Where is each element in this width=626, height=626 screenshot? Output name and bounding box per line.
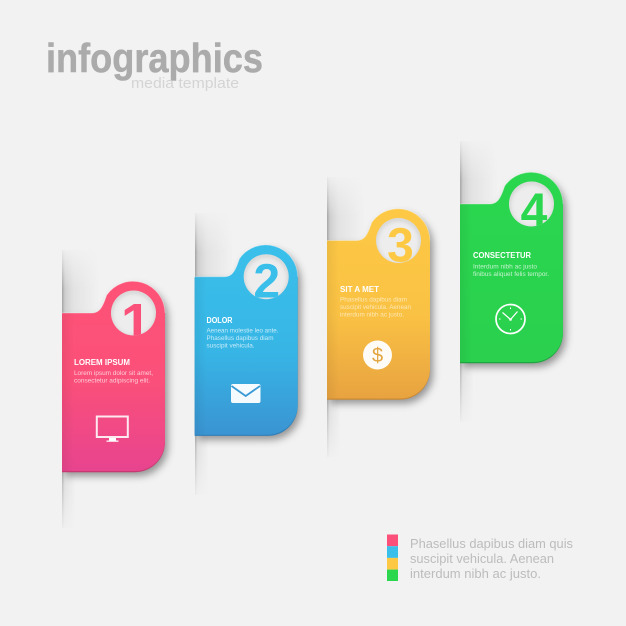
number hole bbox=[509, 182, 554, 226]
panel: step 3 yellow bbox=[327, 177, 433, 457]
text: lorem ipsum: consectetur adipiscing elit. bbox=[74, 378, 150, 384]
number 3: 3 bbox=[387, 220, 414, 272]
legend text: suscipit vehicula. Aenean bbox=[410, 552, 554, 566]
text: lorem ipsum: LOREM IPSUM bbox=[74, 357, 130, 367]
slit shadow bbox=[62, 250, 85, 526]
text: consectetur: CONSECTETUR bbox=[473, 250, 532, 260]
text: dolor: Aenean molestie leo ante. bbox=[206, 328, 279, 334]
icon: clock bbox=[496, 304, 525, 334]
panel: step 4 green bbox=[460, 141, 566, 422]
subheading: media template: media template bbox=[131, 75, 239, 92]
title bbox=[46, 35, 263, 92]
text: sit a met: Phasellus dapibus diam bbox=[340, 296, 407, 304]
heading: infographics: infographics bbox=[46, 35, 263, 81]
text: dolor bbox=[206, 315, 279, 350]
text: lorem ipsum: Lorem ipsum dolor sit amet, bbox=[74, 370, 153, 377]
text: lorem ipsum bbox=[74, 357, 153, 384]
legend text bbox=[410, 537, 573, 581]
number hole bbox=[376, 218, 421, 263]
slit shadow bbox=[327, 178, 350, 455]
text: sit a met bbox=[340, 284, 411, 318]
panel: step 1 pink bbox=[62, 250, 168, 528]
icon: envelope bbox=[231, 384, 260, 403]
card bbox=[62, 281, 168, 476]
card bbox=[460, 172, 566, 367]
number 2: 2 bbox=[253, 256, 280, 309]
icon: dollar coin: $ bbox=[372, 345, 383, 367]
number hole bbox=[111, 290, 156, 336]
slit shadow bbox=[195, 214, 218, 493]
card bbox=[195, 245, 301, 440]
slit shadow bbox=[460, 142, 483, 420]
card bbox=[327, 209, 433, 404]
text: consectetur: finibus aliquet felis tempor. bbox=[473, 271, 549, 278]
icon: monitor bbox=[97, 416, 128, 442]
legend text: Phasellus dapibus diam quis bbox=[410, 537, 573, 551]
text: dolor: Phasellus dapibus diam bbox=[206, 335, 274, 342]
legend text: interdum nibh ac justo. bbox=[410, 567, 541, 581]
legend bbox=[387, 534, 573, 581]
text: dolor: suscipit vehicula. bbox=[206, 342, 255, 350]
legend colour swatches bbox=[387, 534, 398, 581]
text: dolor: DOLOR bbox=[206, 315, 233, 325]
number 1: 1 bbox=[121, 293, 151, 353]
text: sit a met: interdum nibh ac justo. bbox=[340, 312, 404, 318]
number 4: 4 bbox=[521, 185, 548, 238]
panel: step 2 blue bbox=[195, 213, 301, 495]
icon: dollar coin bbox=[363, 340, 392, 370]
text: consectetur bbox=[473, 250, 549, 278]
text: sit a met: suscipit vehicula. Aenean bbox=[340, 304, 411, 311]
text: consectetur: Interdum nibh ac justo bbox=[473, 264, 537, 270]
text: sit a met: SIT A MET bbox=[340, 284, 380, 294]
number hole bbox=[244, 254, 289, 300]
